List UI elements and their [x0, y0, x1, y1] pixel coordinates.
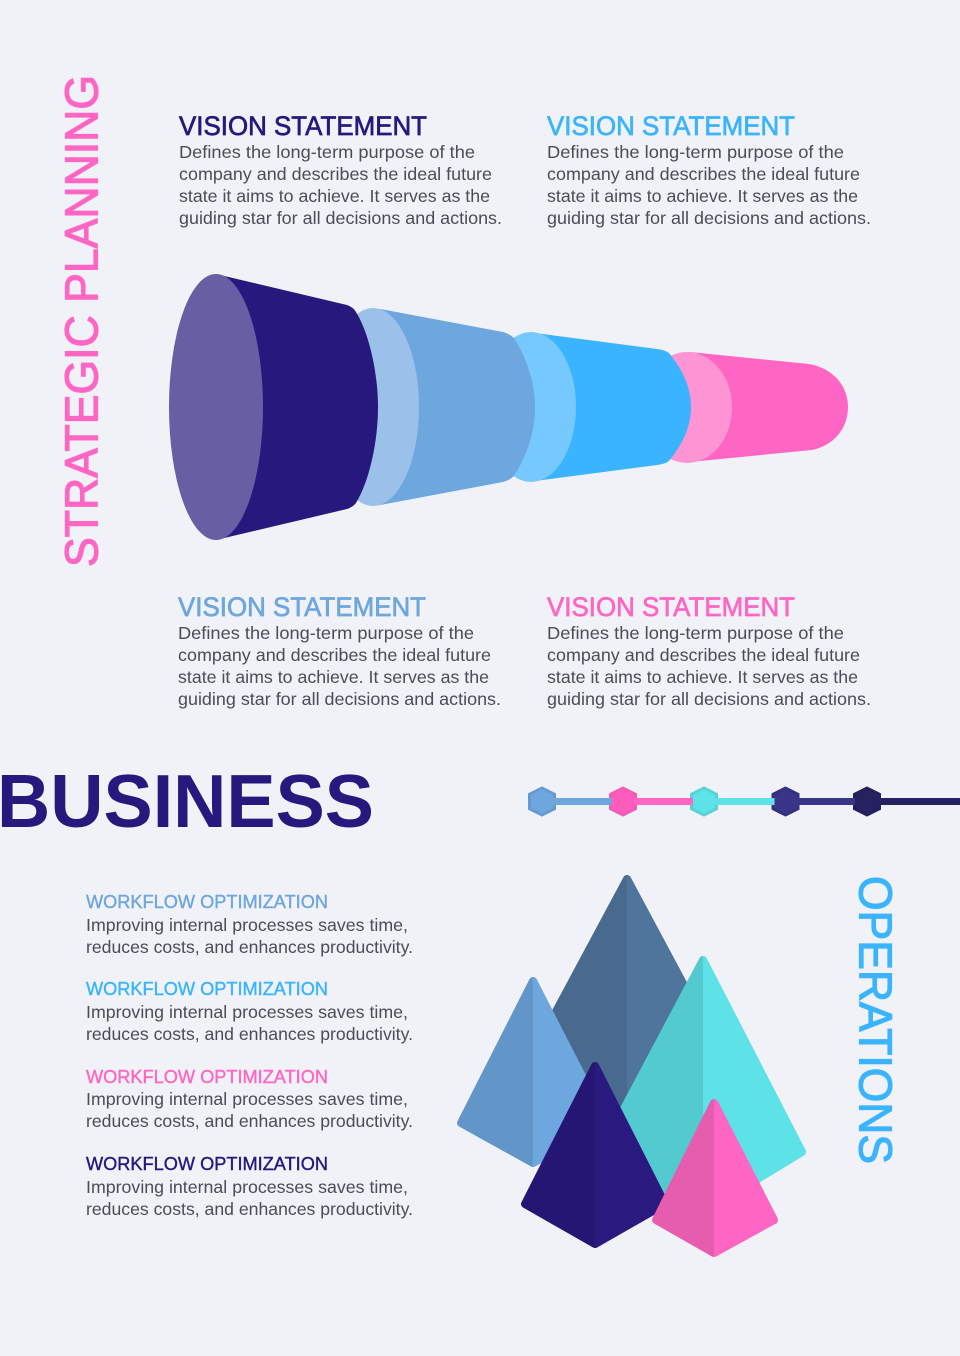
text block: vision statement navy: guiding star for all decisions and actions.	[179, 208, 502, 228]
text block: workflow optimization pink	[86, 1067, 413, 1131]
hexagon edge: cyan	[691, 788, 717, 816]
hexagon: pink	[612, 789, 634, 814]
text block: vision statement pink	[547, 592, 871, 709]
text block: vision statement sky blue	[547, 111, 871, 228]
text block: workflow optimization pink: WORKFLOW OPTIMIZATION	[86, 1067, 328, 1087]
text block: vision statement sky blue: company and describes the ideal future	[547, 164, 860, 184]
pyramid: pink	[656, 1103, 774, 1253]
funnel segment: navy	[169, 274, 378, 540]
funnel segment: pink	[642, 352, 848, 463]
text block: vision statement sky blue: VISION STATEMENT	[547, 111, 795, 141]
hexagon edge: indigo	[772, 788, 798, 816]
text block: vision statement pink: company and describes the ideal future	[547, 645, 860, 665]
text block: vision statement sky blue: guiding star for all decisions and actions.	[547, 208, 871, 228]
text block: vision statement light blue	[178, 592, 501, 709]
text block: workflow optimization navy: WORKFLOW OPTIMIZATION	[86, 1154, 328, 1174]
pyramid: cyan	[620, 956, 806, 1194]
text block: vision statement light blue: Defines the long-term purpose of the	[178, 623, 474, 643]
text block: vision statement sky blue: state it aims to achieve. It serves as the	[547, 186, 858, 206]
vertical title: operations: OPERATIONS	[850, 876, 902, 1164]
funnel segment: sky blue	[486, 332, 691, 482]
hexagon edge: pink	[610, 788, 636, 816]
text block: vision statement sky blue: Defines the long-term purpose of the	[547, 142, 844, 162]
text block: workflow optimization light blue	[86, 892, 413, 957]
hexagon edge: dark navy	[854, 788, 880, 816]
text block: vision statement navy: state it aims to achieve. It serves as the	[179, 186, 490, 206]
pyramid: navy	[525, 1066, 665, 1244]
text block: workflow optimization sky blue	[86, 979, 413, 1044]
text block: vision statement light blue: VISION STATEMENT	[178, 592, 426, 622]
main heading: BUSINESS	[0, 759, 374, 843]
pyramid illustration	[461, 879, 802, 1253]
text block: workflow optimization light blue: WORKFLOW OPTIMIZATION	[86, 892, 328, 912]
text block: vision statement navy: company and describes the ideal future	[179, 164, 492, 184]
hexagon edge: blue	[529, 788, 555, 816]
hexagon: indigo	[774, 789, 796, 814]
text block: vision statement light blue: guiding star for all decisions and actions.	[178, 689, 501, 709]
funnel segment: light blue	[327, 308, 535, 506]
text block: workflow optimization navy: reduces costs, and enhances productivity.	[86, 1199, 413, 1219]
hexagon: cyan	[693, 789, 715, 814]
pyramid: light blue	[461, 981, 606, 1163]
text block: workflow optimization light blue: reduces costs, and enhances productivity.	[86, 937, 413, 957]
text block: vision statement navy	[179, 111, 502, 228]
text block: vision statement pink: VISION STATEMENT	[547, 592, 795, 622]
text block: workflow optimization pink: Improving internal processes saves time,	[86, 1089, 408, 1109]
text block: vision statement light blue: state it aims to achieve. It serves as the	[178, 667, 489, 687]
text block: workflow optimization light blue: Improving internal processes saves time,	[86, 915, 408, 935]
text block: vision statement light blue: company and describes the ideal future	[178, 645, 491, 665]
text block: vision statement pink: Defines the long-term purpose of the	[547, 623, 844, 643]
pyramid: slate blue	[552, 875, 687, 1107]
hexagon: dark navy	[856, 789, 878, 814]
text block: vision statement pink: guiding star for all decisions and actions.	[547, 689, 871, 709]
timeline of hexagon nodes	[529, 788, 960, 816]
funnel chart	[169, 274, 848, 540]
text block: workflow optimization pink: reduces costs, and enhances productivity.	[86, 1111, 413, 1131]
text block: workflow optimization navy: Improving internal processes saves time,	[86, 1177, 408, 1197]
text block: vision statement navy: Defines the long-term purpose of the	[179, 142, 475, 162]
text block: vision statement pink: state it aims to achieve. It serves as the	[547, 667, 858, 687]
text block: workflow optimization sky blue: Improving internal processes saves time,	[86, 1002, 408, 1022]
text block: workflow optimization sky blue: reduces costs, and enhances productivity.	[86, 1024, 413, 1044]
text block: vision statement navy: VISION STATEMENT	[179, 111, 427, 141]
hexagon: blue	[531, 789, 553, 814]
text block: workflow optimization navy	[86, 1154, 413, 1219]
vertical title: strategic planning: STRATEGIC PLANNING	[56, 75, 108, 567]
text block: workflow optimization sky blue: WORKFLOW OPTIMIZATION	[86, 979, 328, 999]
